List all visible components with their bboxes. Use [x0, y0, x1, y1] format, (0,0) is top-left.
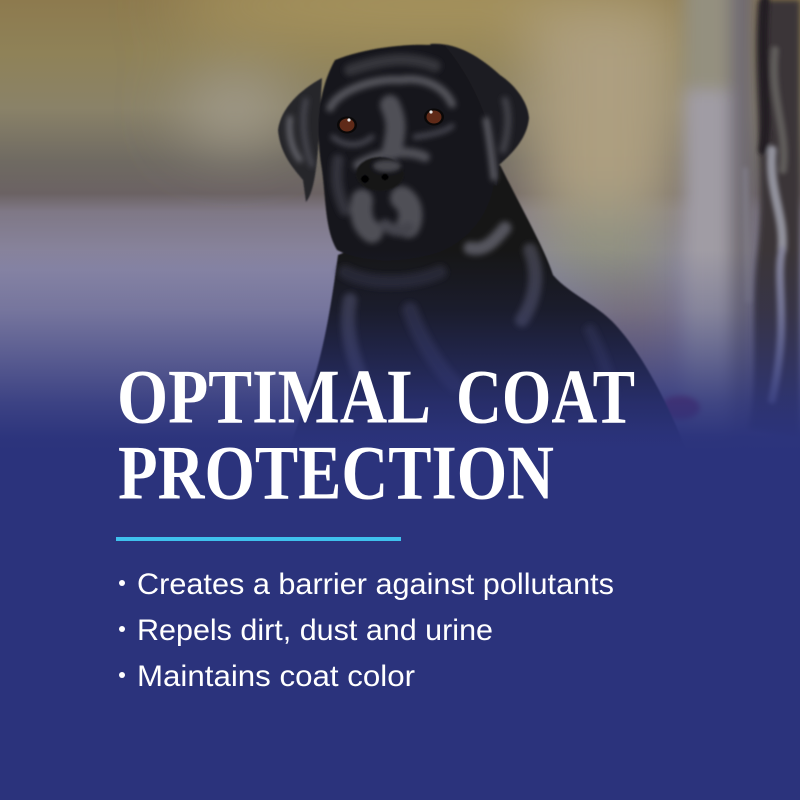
dog right ear [430, 44, 529, 186]
dog head [318, 45, 495, 260]
bullet list [119, 568, 614, 693]
dog nose [356, 157, 404, 191]
navy gradient overlay [0, 250, 800, 451]
bullet list: Repels dirt, dust and urine [137, 614, 493, 647]
bullet list: Creates a barrier against pollutants [137, 568, 614, 601]
title: OPTIMAL [117, 354, 431, 440]
dog body [298, 164, 676, 429]
title [117, 354, 635, 516]
dog eyes [337, 108, 444, 134]
dog left ear [278, 78, 322, 202]
ground hint [666, 395, 700, 418]
title: PROTECTION [118, 430, 554, 516]
divider [116, 537, 401, 541]
photo: dog in front of blurred background [0, 0, 800, 426]
tree trunk [684, 0, 755, 480]
bullet list: Maintains coat color [137, 660, 415, 693]
dog [277, 42, 676, 429]
title: COAT [456, 354, 635, 440]
dog fur sheen [289, 60, 612, 395]
